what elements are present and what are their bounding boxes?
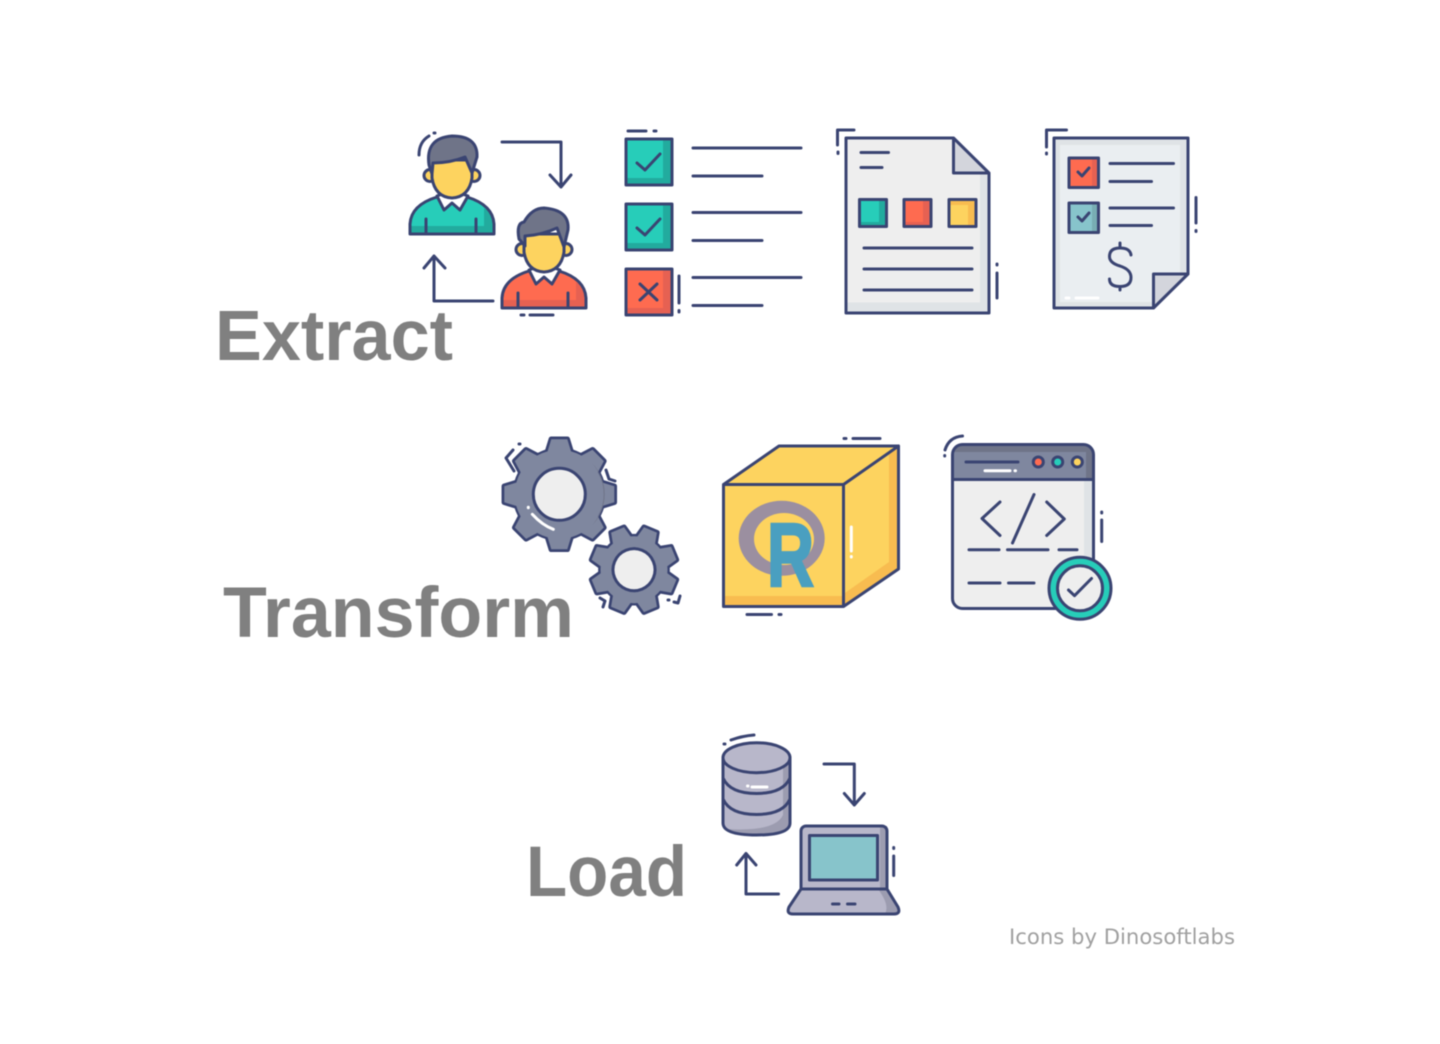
heading: Extract: Extract xyxy=(215,297,453,376)
icon: code window xyxy=(945,436,1111,619)
swatches xyxy=(860,200,976,226)
arrow: down xyxy=(502,142,571,187)
person: teal sweater xyxy=(410,136,494,234)
icon: invoice xyxy=(1046,130,1196,308)
accents xyxy=(945,436,1102,542)
small gear xyxy=(578,514,690,626)
icon: laptop xyxy=(788,826,899,914)
person: red sweater xyxy=(502,208,586,308)
arrow: up xyxy=(424,256,493,301)
accents xyxy=(838,130,997,298)
R logo: R xyxy=(767,506,814,606)
R logo xyxy=(739,501,825,606)
accents xyxy=(628,131,679,312)
dollar sign xyxy=(1110,243,1131,290)
arrow: database to laptop xyxy=(824,764,864,805)
window dots xyxy=(1033,457,1082,467)
heading: Transform: Transform xyxy=(223,574,574,653)
box crossed xyxy=(626,269,672,315)
icon: R cube xyxy=(724,438,898,614)
box checked 1 xyxy=(626,139,672,185)
arrow: laptop to database xyxy=(737,854,778,894)
code glyph lines xyxy=(969,494,1077,583)
icon: gears xyxy=(504,439,690,626)
accents xyxy=(1046,130,1196,232)
credit text: Icons by Dinosoftlabs xyxy=(1009,925,1235,949)
accents xyxy=(506,444,680,607)
accent xyxy=(724,735,754,744)
big gear xyxy=(504,439,614,549)
box checked 2 xyxy=(626,204,672,250)
check badge xyxy=(1049,557,1111,619)
accents xyxy=(747,438,880,614)
icon: people exchange xyxy=(410,133,586,315)
invoice boxes xyxy=(1069,158,1098,232)
accent xyxy=(892,848,895,876)
icon: database xyxy=(723,735,790,835)
icon: checklist xyxy=(626,131,801,315)
heading: Load: Load xyxy=(526,833,687,912)
list lines xyxy=(693,148,801,306)
icon: document with colour swatches xyxy=(838,130,997,313)
accents xyxy=(419,133,553,315)
